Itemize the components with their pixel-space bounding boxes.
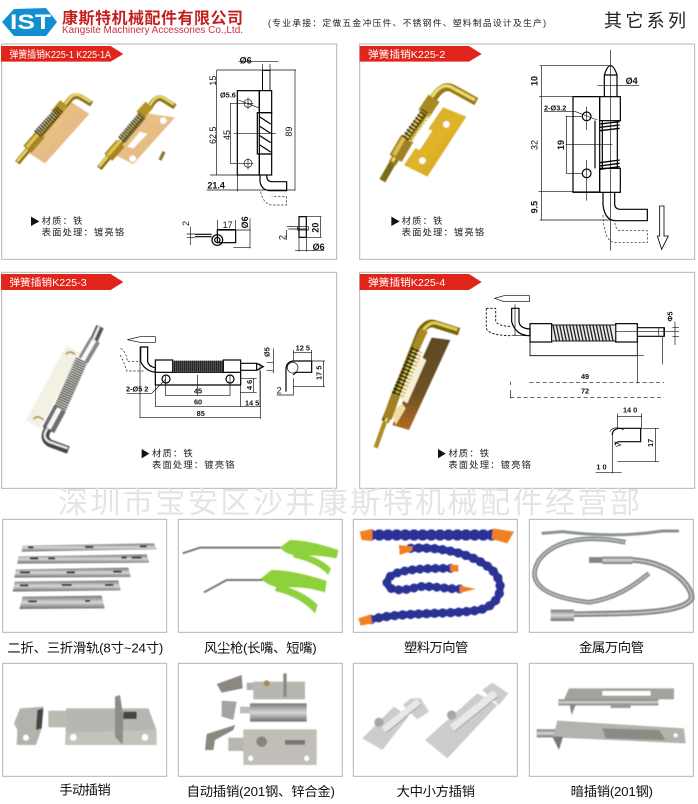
material note (438, 448, 532, 470)
material note: 材质：铁 (42, 215, 84, 226)
drawing: side views: 2 (278, 235, 288, 240)
drawing: side view with dimensions: 85 (197, 409, 205, 418)
panel: manual bolt (3, 663, 167, 798)
material note: 表面处理：镀亮铬 (42, 226, 125, 237)
caption: 风尘枪(长嘴、短嘴) (204, 639, 317, 655)
caption: 二折、三折滑轨(8寸~24寸) (7, 640, 163, 655)
drawing: front view: Ø4 (626, 76, 638, 86)
drawing: side views: 2 (181, 221, 191, 226)
drawing: side view with dimensions: 1 0 (596, 462, 607, 471)
ribbon heading: 弹簧插销K225-3 (9, 276, 87, 289)
material note: 材质：铁 (402, 215, 444, 226)
ribbon heading (360, 274, 482, 290)
row two left products (3, 663, 342, 799)
panel: K225-4 (360, 272, 695, 488)
material note: 表面处理：镀亮铬 (152, 459, 236, 470)
drawing: side view with dimensions: 49 (581, 372, 589, 381)
drawing: front view: 2-Ø3.2 (544, 103, 566, 112)
photo: spring latch pair (17, 95, 175, 168)
drawing: side views: 20 (311, 223, 321, 233)
drawing: side view with dimensions (486, 296, 679, 473)
drawing: side view with dimensions: Φ5 (665, 312, 674, 322)
panel: plastic hoses (353, 519, 517, 655)
caption: 手动插销 (59, 783, 111, 798)
photo: gold latch (376, 323, 459, 448)
drawing: front view (530, 50, 668, 251)
drawing: side views: Ø6 (240, 216, 250, 228)
drawing: side view with dimensions: 14 0 (623, 405, 637, 414)
company name: 康斯特机械配件有限公司 (62, 8, 243, 28)
material note: 表面处理：镀亮铬 (448, 459, 532, 470)
drawing: side view with dimensions (120, 337, 325, 419)
row two right products (353, 663, 693, 799)
caption: 大中小方插销 (397, 784, 475, 799)
watermark: 深圳市宝安区沙井康斯特机械配件经营部 (58, 487, 640, 520)
drawing: side view with dimensions: 17 5 (314, 366, 323, 380)
panel: flush bolts (529, 663, 693, 799)
drawing: front view: 19 (556, 140, 566, 150)
drawing: side views (181, 216, 325, 252)
ribbon heading: 弹簧插销K225-1 K225-1A (9, 48, 111, 61)
photo: spring latch (382, 86, 476, 181)
drawing: front view: 21.4 (207, 180, 225, 190)
panel: square bolts (353, 663, 517, 799)
drawing: front view: 32 (530, 140, 540, 150)
panel: K225-1 (1, 44, 337, 259)
ribbon heading: 弹簧插销K225-2 (368, 48, 446, 61)
drawing: front view: Ø6 (240, 55, 252, 65)
panel: slide rails (3, 519, 167, 655)
ribbon heading (360, 46, 482, 62)
material note (31, 215, 125, 237)
drawing: side view with dimensions: 17 (646, 439, 655, 447)
drawing: side view with dimensions: 60 (194, 398, 202, 407)
drawing: side views: 17 (223, 220, 233, 230)
panel: K225-3 (1, 272, 337, 488)
drawing: front view: 15 (208, 76, 218, 86)
drawing: side view with dimensions: 12 5 (296, 344, 310, 353)
logo (2, 8, 57, 36)
drawing: front view (207, 55, 296, 205)
series title: 其它系列 (604, 11, 686, 31)
panel: K225-2 (360, 44, 695, 259)
row one left products (3, 519, 342, 655)
company name english: Kangsite Machinery Accessories Co.,Ltd. (62, 25, 243, 36)
panel: metal hoses (529, 519, 693, 655)
row one right products (353, 519, 693, 655)
drawing: side view with dimensions: 2 (277, 385, 282, 395)
material note (142, 448, 236, 470)
material note: 材质：铁 (152, 448, 194, 459)
drawing: front view: 9.5 (530, 201, 540, 213)
drawing: side view with dimensions: 4 6 (245, 380, 254, 390)
panel: auto bolt (178, 663, 342, 799)
drawing: front view: 10 (530, 76, 540, 86)
drawing: front view: Ø5.6 (220, 90, 236, 99)
logo: IST (10, 11, 51, 34)
drawing: side view with dimensions: 45 (194, 387, 202, 396)
caption: 自动插销(201钢、锌合金) (187, 784, 335, 799)
drawing: side view with dimensions: 2-Ø5 2 (126, 384, 148, 393)
ribbon heading (1, 46, 123, 62)
caption: 塑料万向管 (404, 640, 468, 655)
drawing: side views: Ø6 (313, 242, 325, 252)
drawing: front view: 62.5 (208, 126, 218, 144)
drawing: side view with dimensions: 72 (581, 387, 589, 396)
header (2, 8, 686, 36)
material note: 表面处理：镀亮铬 (402, 226, 485, 237)
ribbon heading: 弹簧插销K225-4 (368, 276, 446, 289)
material note (391, 215, 485, 237)
panel: air dusters (178, 519, 342, 655)
drawing: front view: 89 (284, 127, 294, 137)
drawing: side view with dimensions: Ø5 (262, 347, 271, 357)
drawing: front view: 45 (222, 130, 232, 140)
service note: (专业承接：定做五金冲压件、不锈钢件、塑料制品设计及生产) (268, 17, 546, 28)
caption: 金属万向管 (579, 640, 644, 655)
ribbon heading (1, 274, 123, 290)
material note: 材质：铁 (448, 448, 490, 459)
drawing: side view with dimensions: 14 5 (245, 399, 259, 408)
photo: chrome latch (26, 327, 100, 450)
caption: 暗插销(201钢) (571, 784, 653, 799)
